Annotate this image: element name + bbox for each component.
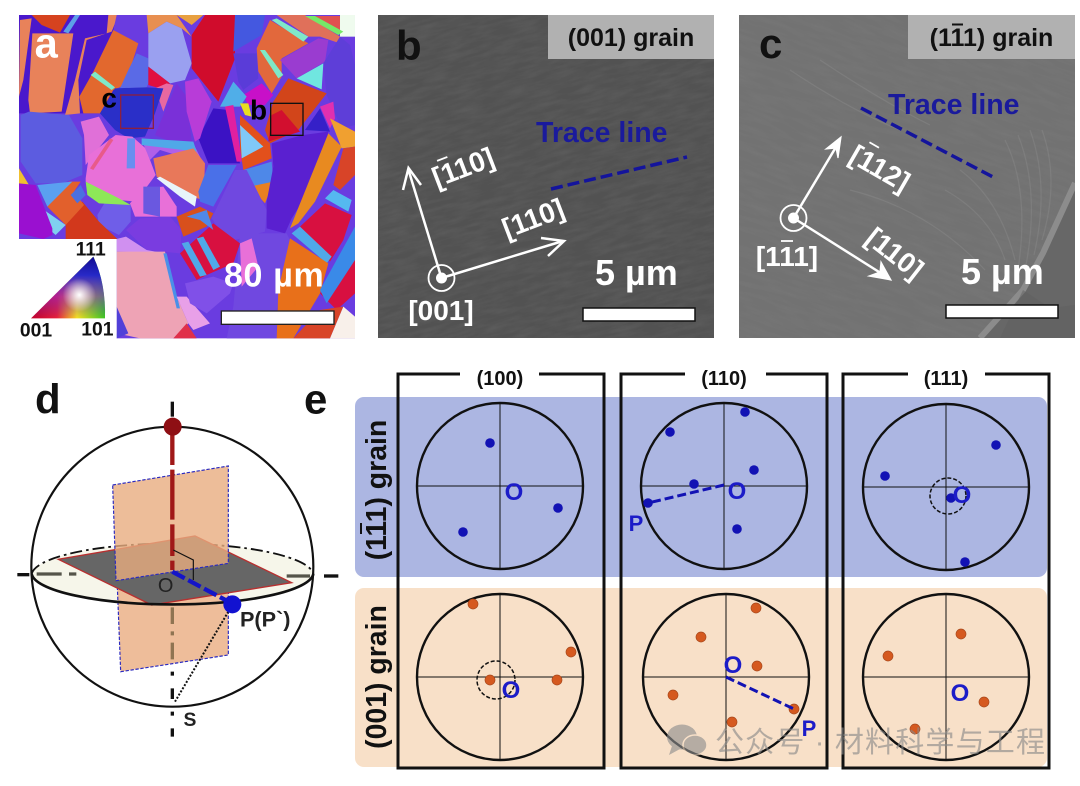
red normal axis xyxy=(166,433,179,570)
white inset behind colour key xyxy=(17,239,117,341)
right angle mark xyxy=(173,550,193,580)
pole figure: (1-11) grain (110) xyxy=(629,403,807,569)
scale label b: 5 µm xyxy=(595,252,678,293)
region label c: c xyxy=(101,83,117,114)
axis labels xyxy=(408,142,569,326)
sphere outline xyxy=(31,427,313,707)
pole figure: (001) grain (110): P xyxy=(802,716,816,741)
axis labels: [112] xyxy=(844,139,915,198)
equatorial plane xyxy=(32,544,313,604)
inverse pole figure colour key xyxy=(20,239,114,342)
trace line label: Trace line xyxy=(536,117,668,149)
horizontal axis xyxy=(17,574,338,576)
row label (001) grain: (001) grain xyxy=(361,605,393,749)
panel b: SEM image of (001) grain xyxy=(378,15,714,338)
pole figure: (001) grain (111) xyxy=(863,594,1029,760)
axis labels: [110] xyxy=(498,193,569,244)
column frame (100) xyxy=(398,368,604,768)
label c: c xyxy=(759,20,782,67)
pole figure: (001) grain (100): O xyxy=(502,677,520,704)
trace line label: Trace line xyxy=(888,89,1020,121)
scale bar b xyxy=(583,308,695,321)
column frame (110): (110) xyxy=(701,368,747,390)
scale bar c xyxy=(946,305,1058,318)
label d: d xyxy=(35,375,61,422)
column frame (111) xyxy=(843,368,1049,768)
panel d: stereographic projection sphere xyxy=(17,375,338,737)
scale label a: 80 µm xyxy=(224,257,324,295)
pole figure: (001) grain (110) xyxy=(643,594,816,760)
red pole point xyxy=(164,418,182,436)
grey projection plane xyxy=(58,536,292,605)
axis labels: [110] xyxy=(428,142,499,193)
column frame (100): (100) xyxy=(477,368,523,390)
grain tag: (111) grain xyxy=(930,24,1053,52)
axis labels: [110] xyxy=(860,222,929,285)
scale bar a xyxy=(221,311,334,324)
back of equator xyxy=(32,544,313,574)
dotted projection line xyxy=(175,612,228,702)
pole figure: (001) grain (100) xyxy=(417,594,583,760)
panel a: EBSD orientation map xyxy=(17,15,355,342)
label P(P`): P(P`) xyxy=(240,607,291,632)
pole figure: (001) grain (111): O xyxy=(951,680,969,707)
lower orange plane xyxy=(117,587,228,672)
column frame (111): (111) xyxy=(924,368,968,390)
icon: chat bubbles xyxy=(667,724,707,755)
blue band (1-11) grain xyxy=(355,397,1047,577)
crystal axes arrows xyxy=(780,137,891,280)
panel e: pole figures xyxy=(355,368,1049,768)
column frame (110) xyxy=(621,368,827,768)
pole figure: (1-11) grain (111): O xyxy=(953,482,971,509)
label O: O xyxy=(158,575,173,597)
blue OP line xyxy=(172,572,227,601)
pole figure: (1-11) grain (110): P xyxy=(629,511,643,536)
pole figure: (1-11) grain (111) xyxy=(863,404,1029,570)
inverse pole figure colour key: 111 xyxy=(76,239,106,260)
grain tag xyxy=(908,15,1075,59)
pole figure: (1-11) grain (100): O xyxy=(505,479,523,506)
orange band (001) grain xyxy=(355,588,1047,767)
crystal axes arrows xyxy=(403,168,564,291)
inverse pole figure colour key: 001 xyxy=(20,321,52,342)
front of equator xyxy=(32,574,313,604)
pole figure: (1-11) grain (100) xyxy=(417,403,583,569)
inverse pole figure colour key: 101 xyxy=(81,319,114,340)
region label b: b xyxy=(250,94,267,125)
region box b xyxy=(271,103,303,135)
axis labels: [111] xyxy=(756,241,818,272)
label S: S xyxy=(184,710,197,731)
pole figure: (1-11) grain (110): O xyxy=(728,478,746,505)
pole figure: (001) grain (110): O xyxy=(724,652,742,679)
blue point P xyxy=(223,595,241,613)
axis labels: [001] xyxy=(408,295,474,326)
row label (1-11) grain: (111) grain xyxy=(361,420,393,560)
watermark text: 公众号 · 材料科学与工程 xyxy=(715,726,1045,759)
panel c: SEM image of (1-11) grain xyxy=(739,15,1075,338)
region box c xyxy=(121,95,153,128)
label a: a xyxy=(35,19,59,66)
trace line xyxy=(861,108,993,177)
grain tag xyxy=(548,15,714,59)
grain tag: (001) grain xyxy=(568,24,694,52)
watermark xyxy=(667,724,1045,759)
axis labels xyxy=(756,137,929,285)
vertical axis xyxy=(167,402,177,737)
map grains xyxy=(19,15,355,338)
label b: b xyxy=(396,22,422,69)
upper orange plane xyxy=(113,466,228,581)
trace line xyxy=(551,157,687,189)
scale label c: 5 µm xyxy=(961,251,1044,292)
label e: e xyxy=(304,375,327,422)
